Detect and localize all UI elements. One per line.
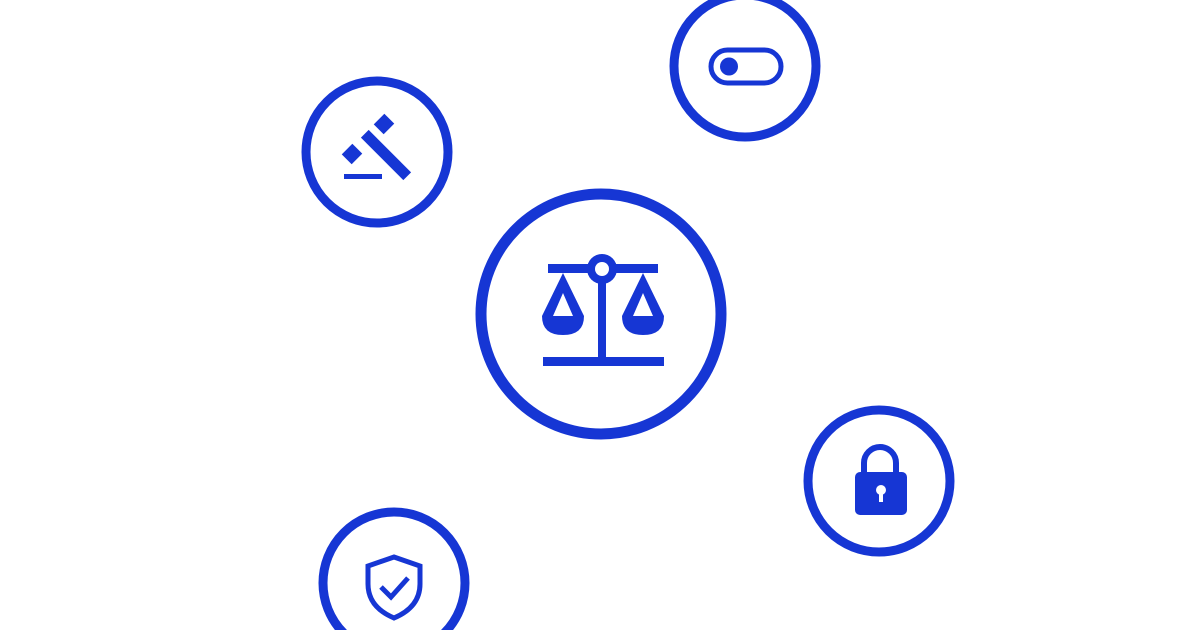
icon: shield circle	[323, 512, 465, 630]
icon: gavel circle	[306, 81, 448, 223]
icon: scale circle (center)	[481, 194, 721, 434]
icon: toggle circle	[674, 0, 816, 137]
icon: lock circle	[808, 410, 950, 552]
